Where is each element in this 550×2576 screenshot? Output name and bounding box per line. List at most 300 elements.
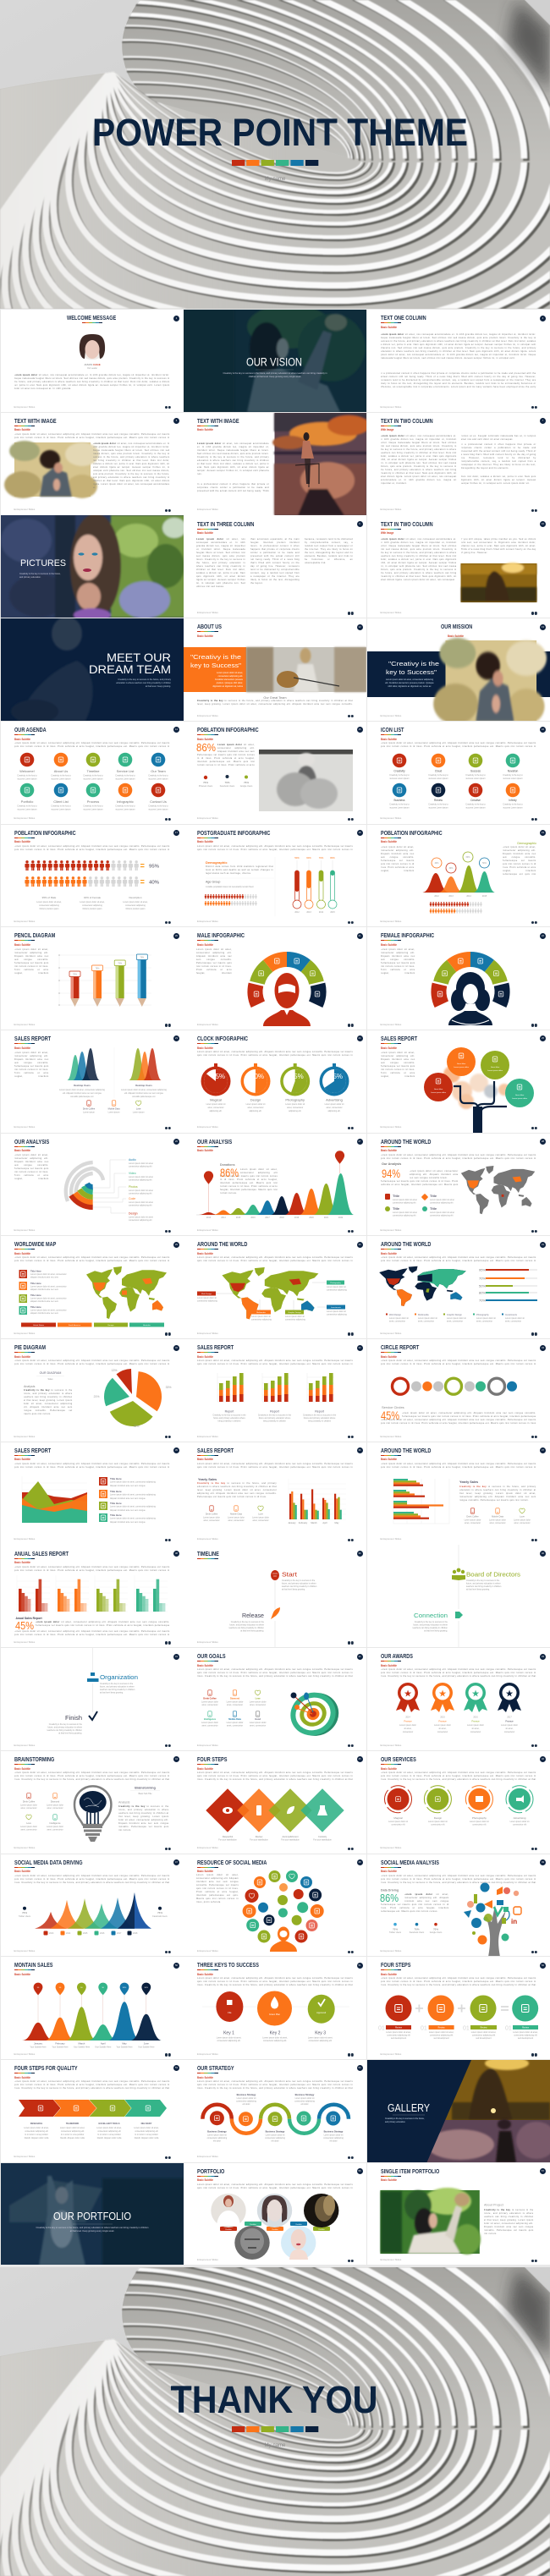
footer: Entrepreneur Slides bbox=[381, 1332, 401, 1335]
column chart and icons: April bbox=[322, 1521, 327, 1524]
bulb and icons: Lorem ipsum dolor bbox=[20, 1804, 37, 1806]
portrait ovals: Portfolio bbox=[318, 2228, 326, 2231]
subtitle: Basic Subtitle bbox=[14, 428, 30, 431]
footer: Entrepreneur Slides bbox=[381, 1228, 401, 1232]
stat, social icons and browser: 76% bbox=[224, 781, 230, 784]
page badge: 45 bbox=[359, 1758, 360, 1760]
portrait photo with text: PICTURES bbox=[20, 558, 66, 568]
page badge: 15 bbox=[359, 728, 360, 731]
map, bars and legend: amet, consectetur bbox=[504, 1321, 521, 1323]
wave diagram: Lorem ipsum dolor sit bbox=[207, 2134, 227, 2136]
slide: four steps plus bbox=[367, 1957, 550, 2059]
map, list and legend: aliquam tincidunt ante nec sem bbox=[30, 1277, 58, 1279]
bell charts and icons: convallis pellentesque vel. bbox=[70, 1096, 94, 1098]
page badge bbox=[173, 315, 179, 321]
award ribbons: sit amet, bbox=[404, 1727, 411, 1730]
subtitle: Basic Subtitle bbox=[197, 2076, 213, 2079]
column chart and icons: amet, consectetur bbox=[203, 1519, 220, 1522]
timeline: teachers can bring creativity in children bbox=[47, 1729, 82, 1732]
map, list and legend: Lorem ipsum dolor sit amet, consectetur bbox=[30, 1286, 66, 1288]
stacked bar charts: bring creativity in children bbox=[263, 1420, 287, 1423]
title: SOCIAL MEDIA DATA DRIVING bbox=[14, 1859, 82, 1866]
agenda icon grid: Infographic bbox=[117, 799, 133, 804]
page badge bbox=[357, 1859, 362, 1865]
peak chart: Twitter Users bbox=[19, 1915, 30, 1917]
page badge: 47 bbox=[175, 1861, 178, 1864]
timeline: at that level keep growing. bbox=[100, 1692, 124, 1694]
agenda icon grid: success Lorem ipsum bbox=[83, 808, 102, 810]
mountain chart: 50 bbox=[80, 1987, 83, 1989]
service circles: consectetur elit bbox=[472, 1823, 486, 1826]
title: OUR AWARDS bbox=[381, 1652, 412, 1660]
thermometers and people: Demographic bbox=[206, 860, 228, 865]
analysis text: Creativity is the key to success in the future, and primary education is where teachers can bring creativity in children at that level, keep growing. Lorem ipsum dolor sit amet, consectetur adipiscing elit. Aliquam tincidunt ante nec sem congue convallis. Pellentesque vel mauris quis nisi rutrum. bbox=[118, 1805, 169, 1832]
footer: Entrepreneur Slides bbox=[14, 1125, 35, 1129]
slide: text with image 1 bbox=[0, 413, 183, 515]
yearly text: Creativity is the key to success in the future, and primary education is where teachers can bring creativity in children at that level, keep growing. Lorem ipsum dolor sit amet, consectetur adipiscing elit. Aliquam tincidunt ante nec sem congue convallis. Pellentesque vel mauris quis nisi rutrum. bbox=[459, 1486, 536, 1502]
three circles: consectetur adipiscing elit. bbox=[309, 2040, 333, 2042]
mountain chart: 2012 bbox=[434, 895, 439, 897]
icons and target: amet, consectetur bbox=[201, 1725, 218, 1727]
agenda icon grid: Process bbox=[86, 799, 99, 804]
clock charts: Lorem ipsum dolor sit bbox=[246, 1103, 266, 1106]
bar chart and icons: amet, consectetur bbox=[489, 1522, 505, 1524]
page badge bbox=[173, 1139, 179, 1145]
step circles: 01 bbox=[420, 2026, 426, 2032]
title: MALE INFOGRAPHIC bbox=[197, 931, 245, 939]
stat, social icons and browser: Facebook Users bbox=[220, 785, 235, 788]
body text 2: Pellentesque vel mauris quis nisi rutrum cursus in id risus. Proin vehicula ut arcu feugiat, interdum pellentesque est. Mauris quis nisi rutrum cursus in id risus. Proin vehicula ut arcu feugiat, interdum pellentesque. Mauris quis nisi rutrum cursus. bbox=[220, 1175, 278, 1195]
subtitle: Basic Subtitle bbox=[381, 1767, 397, 1771]
portrait and name: Our Leader bbox=[86, 367, 97, 370]
map and callouts: consectetur adipiscing bbox=[285, 1319, 305, 1321]
bulb and icons: Love bbox=[26, 1821, 31, 1825]
thermometers and people: 60% bbox=[306, 856, 311, 860]
timeline: at that level keep growing. bbox=[240, 1630, 264, 1633]
map and items: Lorem ipsum dolor sit amet bbox=[430, 1199, 454, 1201]
thermometers and people: 70% bbox=[319, 856, 324, 860]
bell charts and icons: Mobile Data bbox=[107, 1107, 120, 1110]
tree chart: Great Idea bbox=[514, 1094, 524, 1096]
footer: Entrepreneur Slides bbox=[14, 1744, 35, 1747]
peak chart: 76% bbox=[157, 1910, 162, 1914]
title: SALES REPORT bbox=[14, 1035, 51, 1042]
slide: four steps diamonds bbox=[184, 1751, 366, 1854]
bar chart and icons: amet, consectetur bbox=[514, 1522, 530, 1524]
slide: sales report columns bbox=[184, 1442, 366, 1545]
column 3: because, reviewers tend to be distracted by comprehensible content, say, a random text copied from a newspaper or the internet. They are likely to focus on the text, disregarding the layout and its elements. Besides, random text risks to be humorous or offensive, an unacceptable risk. bbox=[305, 538, 353, 564]
chevrons: consectetur adipiscing elit bbox=[135, 2130, 158, 2133]
three circles: File bbox=[228, 2011, 232, 2014]
mountain chart: Demographic bbox=[517, 841, 536, 844]
map, bars and legend: Lorem ipsum dolor sit bbox=[476, 1317, 496, 1320]
icons and target: Lorem ipsum dolor bbox=[227, 1701, 244, 1704]
wave diagram: elit dolor bbox=[300, 2103, 309, 2106]
people chart: 40% bbox=[149, 880, 159, 885]
map and items: Title bbox=[393, 1194, 399, 1198]
gallery photos and text bbox=[367, 2060, 550, 2162]
stat, social icons and browser: 86% bbox=[196, 741, 216, 754]
title: POBLATION INFOGRAPHIC bbox=[14, 829, 75, 837]
footer: Entrepreneur Slides bbox=[14, 1846, 35, 1849]
band and photo bbox=[367, 636, 550, 721]
map, bars and legend: Lorem ipsum dolor sit bbox=[418, 1317, 437, 1320]
title: BRAINSTORMING bbox=[14, 1755, 54, 1763]
three circles: Key 3 bbox=[315, 2031, 326, 2036]
step circles: Lorem ipsum dolor sit amet, bbox=[386, 2031, 411, 2034]
sunset silhouette photo bbox=[459, 562, 538, 603]
people chart: Lorem ipsum dolor sit amet, bbox=[80, 900, 105, 904]
title: MONTAIN SALES bbox=[14, 1961, 52, 1969]
clock charts: adipiscing elit. bbox=[289, 1110, 302, 1112]
chevrons: consectetur adipiscing elit bbox=[97, 2130, 121, 2133]
title: OUR ANALYSIS bbox=[14, 1138, 49, 1145]
clock charts bbox=[201, 1063, 349, 1112]
step circles: Lorem ipsum dolor sit amet, bbox=[513, 2031, 538, 2034]
award ribbons: 2016 bbox=[473, 1716, 478, 1719]
hump chart: 2021 bbox=[324, 1217, 329, 1219]
subtitle: Basic Subtitle bbox=[197, 1149, 213, 1152]
page badge: 56 bbox=[359, 2170, 360, 2172]
wave diagram: elit dolor bbox=[271, 2139, 279, 2142]
step circles: consectetur adipiscing elit bbox=[429, 2035, 453, 2037]
body text: Lorem ipsum dolor sit amet, nos consequat accommodare et. In nibh gravida dictum leo, magna sit imperdiet ut, tincidunt tortor. Neque malesuada feugiat libero at lorem. Sed ultrices nisi sed massa dictum, quis ante pretium lorem. Creativity is the key to success in the future, and primary education is where teachers can bring creativity in children at that level. Duis nisl dolor, sodales a dictum vel, porta in erat. Nam quis dignissim nibh, sit amet dictum ligula ac tempor. Aenean semper finibus mi, in volutpat velit pharetra non. Sed ultrices nisi sed massa dictum, quis ante pretium. Creativity is the key to success in the future, and primary education is where teachers can bring creativity in children at that level. Nam quis dignissim nibh, sit amet dictum ligula. Lorem ipsum dolor sit amet, nos consequat accommodare et. bbox=[93, 442, 169, 489]
slide: around the world navy map bbox=[367, 1236, 550, 1338]
title: FOUR STEPS bbox=[197, 1755, 227, 1763]
portrait and name bbox=[80, 333, 105, 370]
column 2: than accumsan equamodo, at the main feugiat. Interdum pretium tincidunt lorem. In professional context it often happens that private or corporate clients corder a publication to be made and presented with the actual content still not being ready. Think of a news blog that's filled with content hourly on the day of going live. However, reviewers tend to be distracted by comprehensible content, say, a random text copied from a newspaper or the internet. They are likely to focus on the text, disregarding the layout. bbox=[250, 538, 300, 585]
bar chart and icons: Lorem ipsum dolor bbox=[514, 1519, 531, 1521]
timeline: Creativity is the key to success in the bbox=[414, 1621, 448, 1623]
slide: anual sales report bbox=[0, 1545, 183, 1647]
award ribbons: France bbox=[471, 1720, 479, 1723]
footer: Entrepreneur Slides bbox=[14, 1228, 35, 1232]
slide: text with image 2 bbox=[184, 413, 366, 515]
wave diagram: Lorem ipsum dolor sit bbox=[237, 2097, 256, 2100]
fan chart: consectetur adipiscing elit bbox=[129, 1165, 151, 1167]
footer: Entrepreneur Slides bbox=[197, 1640, 218, 1644]
mountain chart: May bbox=[122, 2042, 127, 2046]
map and items: Title bbox=[430, 1194, 437, 1198]
bulb and icons: Basic Sub Title bbox=[138, 1793, 152, 1795]
quote box and photo bbox=[184, 646, 366, 700]
page badge: 54 bbox=[359, 2067, 360, 2069]
footer: Entrepreneur Slides bbox=[14, 1332, 35, 1335]
area chart and list: Title Here bbox=[110, 1490, 121, 1493]
hump chart: 86% bbox=[220, 1166, 239, 1179]
wave diagram: Lorem ipsum dolor sit bbox=[295, 2097, 315, 2100]
circles: 45% bbox=[381, 1409, 399, 1422]
body text: Lorem ipsum dolor sit amet, nos consequat accommodare et. In nibh gravida dictum leo, magna sit imperdiet ut, tincidunt tortor. Neque malesuada feugiat libero at lorem. Sed ultrices nisi sed massa dictum, quis ante pretium lorem. Creativity is the key to success in the future, and primary education is where teachers can bring creativity in children at that level. Duis nisl dolor, sodales a dictum vel, porta in erat. Nam quis dignissim nibh, sit amet dictum ligula ac tempor. Aenean semper finibus mi, in volutpat velit pharetra non. bbox=[197, 442, 269, 475]
icon grid bbox=[389, 753, 523, 809]
title: OUR SERVICES bbox=[381, 1755, 415, 1763]
map and callouts: Lorem ipsum dolor sit bbox=[327, 1310, 346, 1313]
map and items bbox=[381, 1162, 535, 1217]
icon grid: success Lorem ipsum bbox=[465, 777, 485, 780]
service circles: consectetur elit bbox=[391, 1823, 404, 1826]
chevrons: blandit. Aliquam dolor nulla bbox=[96, 2137, 121, 2139]
fan chart: consectetur adipiscing elit bbox=[129, 1178, 151, 1181]
agenda icon grid: success Lorem ipsum bbox=[17, 777, 36, 780]
diamonds: For your satisfaction bbox=[281, 1838, 300, 1841]
icon grid: Creativity is the key to bbox=[503, 774, 523, 777]
step circles: Lorem ipsum dolor sit amet, bbox=[428, 2031, 454, 2034]
thermometers and people: 2014 bbox=[319, 910, 324, 914]
map and items: Title bbox=[430, 1206, 437, 1211]
mountain chart: Your Subtitle Here bbox=[30, 2046, 47, 2049]
map and callouts: consectetur adipiscing bbox=[327, 1314, 347, 1316]
photo with text bbox=[0, 2163, 183, 2266]
band and photo: Lorem ipsum dolor sit amet, consectetur adipiscing bbox=[385, 678, 433, 681]
people chart: consectetur adipiscing bbox=[39, 904, 59, 907]
map and callouts: Lorem ipsum dolor sit bbox=[251, 1315, 271, 1318]
wave diagram: consectetur adipiscing bbox=[236, 2100, 256, 2102]
map, bars and legend: Lorem ipsum dolor sit bbox=[504, 1317, 525, 1320]
page badge bbox=[173, 2065, 179, 2071]
column chart and icons: May bbox=[335, 1521, 339, 1524]
icon grid: Creative bbox=[470, 799, 481, 802]
stat text: Lorem ipsum dolor sit amet, consectetur adipiscing elit. Aliquam tincidunt ante nec sem congue convallis lorem. bbox=[410, 1170, 459, 1179]
agenda icon grid: Welcome! bbox=[19, 769, 34, 773]
award ribbons: ★ bbox=[438, 1689, 447, 1700]
colour bar bbox=[232, 160, 318, 166]
icon grid: success Lorem ipsum bbox=[389, 777, 409, 780]
map, bars and legend: Photography bbox=[476, 1313, 489, 1316]
bar chart and icons: amet, consectetur bbox=[464, 1522, 481, 1524]
map and callouts: Multimedia bbox=[256, 1311, 267, 1314]
area chart and list: Lorem ipsum dolor sit amet, consectetur adipiscing bbox=[110, 1505, 156, 1508]
slide: around the world grey map bbox=[367, 1134, 550, 1235]
chevrons: In in tortor in urna porttitor bbox=[60, 2134, 84, 2136]
wave diagram: Lorem ipsum dolor sit bbox=[324, 2134, 344, 2136]
pie chart bbox=[24, 1369, 171, 1428]
page badge bbox=[357, 1345, 362, 1350]
slide: pictures bbox=[0, 515, 183, 618]
footer: Entrepreneur Slides bbox=[197, 1949, 218, 1953]
map, bars and legend: Graphic Design bbox=[447, 1313, 462, 1316]
slide: four steps for quality bbox=[0, 2060, 183, 2162]
page badge bbox=[540, 1139, 546, 1145]
chevrons: RESEARCH bbox=[30, 2122, 42, 2125]
step circles: consectetur adipiscing elit bbox=[471, 2035, 495, 2037]
icons and target: amet, consectetur bbox=[227, 1725, 243, 1727]
page badge bbox=[540, 830, 546, 836]
bell charts and icons: Lorem ipsum bbox=[83, 1111, 94, 1113]
slide: our analysis humps bbox=[184, 1134, 366, 1235]
title: SALES REPORT bbox=[197, 1343, 234, 1351]
slide: our awards bbox=[367, 1648, 550, 1750]
icon grid: Creativity is the key to bbox=[465, 803, 486, 805]
map, list and legend: Australia bbox=[143, 1324, 151, 1326]
diamonds: Respectful bbox=[223, 1835, 234, 1838]
subtitle: Basic Subtitle bbox=[14, 1458, 30, 1461]
slide: timeline board bbox=[367, 1545, 550, 1647]
step circles: 01 bbox=[377, 2026, 384, 2032]
footer: Entrepreneur Slides bbox=[14, 1435, 35, 1438]
slide: pie diagram bbox=[0, 1339, 183, 1442]
award ribbons: 2015 bbox=[440, 1716, 445, 1719]
title: SALES REPORT bbox=[197, 1447, 234, 1454]
photo with text: at that level. Keep growing every single week. bbox=[69, 2229, 114, 2233]
project text: Creativity is the key to success in the future, and primary education is where teachers can bring creativity in children at that level, keep growing. Lorem ipsum dolor sit amet, consectetur adipiscing elit. Aliquam tincidunt ante nec sem congue convallis. Pellentesque vel mauris quis nisi rutrum. bbox=[484, 2209, 533, 2235]
hump chart: 2018 bbox=[279, 1217, 284, 1219]
three circles: Key 2 bbox=[270, 2031, 281, 2036]
bulb and icons: Drink Coffee bbox=[22, 1799, 35, 1803]
footer: Entrepreneur Slides bbox=[381, 1744, 401, 1747]
map, bars and legend: 95% bbox=[479, 1268, 486, 1272]
bar chart and icons bbox=[367, 1442, 550, 1545]
page badge bbox=[540, 315, 546, 321]
area chart and list: Lorem ipsum dolor sit amet, consectetur adipiscing bbox=[110, 1493, 156, 1496]
title: AROUND THE WORLD bbox=[381, 1447, 431, 1454]
hump chart: 2022 bbox=[338, 1217, 344, 1219]
hump chart: 2013 bbox=[206, 1217, 212, 1219]
subtitle: Basic Subtitle bbox=[197, 428, 213, 431]
map, list and legend: aliquam tincidunt ante nec sem bbox=[30, 1288, 58, 1291]
column chart and icons: Drink Coffee bbox=[206, 1512, 218, 1515]
closing cover: spiral background bbox=[0, 2267, 550, 2576]
page badge bbox=[357, 1242, 362, 1248]
photo with text: Creativity is the key to success in the future, and primary bbox=[118, 678, 171, 681]
clock charts: amet, consectetur bbox=[247, 1107, 264, 1109]
bell charts and icons: convallis pellentesque vel. bbox=[132, 1096, 156, 1098]
peak chart: 76% bbox=[21, 1910, 27, 1914]
subtitle: Basic Subtitle bbox=[197, 1046, 213, 1050]
footer: Entrepreneur Slides bbox=[197, 714, 218, 717]
page badge: 27 bbox=[359, 1140, 360, 1143]
map, list and legend: aliquam tincidunt ante nec sem bbox=[30, 1300, 58, 1303]
award ribbons: 2014 bbox=[405, 1716, 410, 1719]
page badge: 10 bbox=[542, 523, 544, 525]
agenda icon grid: success Lorem ipsum bbox=[51, 777, 70, 780]
portrait ovals: Portfolio bbox=[250, 2223, 257, 2226]
subtitle: Basic Subtitle bbox=[14, 738, 30, 741]
footer: Entrepreneur Slides bbox=[381, 1435, 401, 1438]
title: CLOCK INFOGRAPHIC bbox=[197, 1035, 248, 1042]
three circles: Lorem ipsum dolor sit amet, bbox=[217, 2037, 242, 2040]
bell charts and icons: elit. Aliquam tincidunt ante nec sem congue bbox=[124, 1092, 163, 1095]
page badge bbox=[357, 2168, 362, 2174]
timeline: at that level keep growing. bbox=[58, 1733, 82, 1735]
icon grid: success Lorem ipsum bbox=[465, 806, 485, 809]
footer: Entrepreneur Slides bbox=[381, 2052, 401, 2056]
tree chart: Great Idea bbox=[490, 1066, 499, 1068]
footer: Entrepreneur Slides bbox=[197, 1846, 218, 1849]
page badge: 13 bbox=[542, 626, 544, 629]
timeline: future, and primary education is where bbox=[229, 1624, 265, 1627]
award ribbons: ★ bbox=[404, 1689, 412, 1700]
award ribbons: consectetur bbox=[503, 1731, 514, 1733]
slide: gallery bbox=[367, 2060, 550, 2162]
timeline bbox=[0, 1648, 183, 1750]
icon grid: Creativity is the key to bbox=[428, 803, 448, 805]
map and items: Title bbox=[393, 1206, 399, 1211]
service circles: Lorem ipsum dolor sit bbox=[469, 1821, 489, 1823]
thermometers and people: 2015 bbox=[330, 910, 335, 914]
page badge: 57 bbox=[542, 2170, 544, 2172]
award ribbons: consectetur bbox=[470, 1731, 481, 1733]
chevrons: Lorem ipsum dolor sit amet, bbox=[96, 2127, 122, 2129]
slide: text in two column bbox=[367, 413, 550, 515]
bulb and icons: Intelligence bbox=[49, 1821, 61, 1825]
quote box and photo: "Creativy is the bbox=[190, 655, 241, 661]
footer: Entrepreneur Slides bbox=[381, 1537, 401, 1541]
page badge: 43 bbox=[542, 1656, 544, 1658]
footer: Entrepreneur Slides bbox=[197, 816, 218, 820]
subtitle: Basic Subtitle bbox=[381, 943, 397, 947]
wave diagram: Business Strategy bbox=[266, 2129, 285, 2133]
slide: population people chart bbox=[0, 824, 183, 926]
slide: welcome message bbox=[0, 310, 183, 412]
step circles: Lorem ipsum dolor sit amet, bbox=[470, 2031, 496, 2034]
portrait and name: JASON CAGE bbox=[84, 363, 100, 366]
column 1: Lorem ipsum dolor sit amet, nos consequat accommodare et. In nibh gravida dictum leo, magna sit imperdiet ut, tincidunt tortor. Neque malesuada feugiat libero at lorem. Sed ultrices nisi sed massa dictum, quis ante pretium lorem. Creativity is the key to success in the future, and primary education is where teachers can bring creativity in children at that level. Duis nisl dolor, sodales a dictum vel, porta in erat. Nam quis dignissim nibh, sit amet dictum ligula ac tempor. Aenean semper finibus mi, in volutpat velit pharetra non. Sed ultrices nisi sed massa. bbox=[196, 538, 245, 588]
icons and target: amet, consectetur bbox=[250, 1725, 266, 1727]
icon grid: Creativity is the key to bbox=[465, 774, 486, 777]
timeline: at that level keep growing. bbox=[424, 1630, 448, 1633]
title: WELCOME MESSAGE bbox=[66, 314, 116, 321]
chevrons: blandit. Aliquam dolor nulla bbox=[24, 2137, 48, 2139]
map, list and legend: Title Here bbox=[30, 1282, 41, 1285]
agenda icon grid: About Us bbox=[53, 769, 68, 773]
map, bars and legend: 80% bbox=[479, 1291, 486, 1295]
people chart: Dictum pretium quam bbox=[125, 907, 145, 910]
title: ICON LIST bbox=[381, 726, 404, 733]
page badge bbox=[357, 1551, 362, 1557]
agenda icon grid: success Lorem ipsum bbox=[148, 808, 168, 810]
slide: timeline start bbox=[184, 1545, 366, 1647]
slide: worldwide map bbox=[0, 1236, 183, 1338]
bulb and icons: amet, consectetur bbox=[47, 1807, 63, 1810]
agenda icon grid bbox=[17, 753, 168, 810]
mountain chart: 2013 bbox=[448, 895, 454, 897]
page badge: 44 bbox=[175, 1758, 178, 1760]
icons and target: Good bbox=[255, 1717, 261, 1721]
subtitle: Basic Subtitle bbox=[381, 1664, 397, 1667]
footer: Entrepreneur Slides bbox=[381, 714, 401, 717]
mountain chart: 50% bbox=[144, 1987, 148, 1989]
bar chart and icons: Love bbox=[520, 1514, 525, 1518]
timeline bbox=[184, 1545, 366, 1647]
page badge bbox=[540, 727, 546, 733]
slide: our mission bbox=[367, 618, 550, 721]
column 1: Lorem ipsum dolor sit amet, nos consequat accommodare et. In nibh gravida dictum leo, magna sit imperdiet ut, tincidunt tortor. Neque malesuada feugiat libero at lorem. Sed ultrices nisi sed massa dictum, quis ante pretium lorem. Creativity is the key to success in the future, and primary education is where teachers can bring creativity in children at that level. Duis nisl dolor, sodales a dictum vel, porta in erat. Nam quis dignissim nibh, sit amet dictum ligula ac tempor. Aenean semper finibus mi, in volutpat velit pharetra non. Sed ultrices nisi sed massa dictum, quis ante pretium. Creativity is the key to success in the future, and primary education is where teachers can bring creativity in children at that level. Nam quis dignissim nibh, sit amet dictum ligula. Lorem ipsum dolor sit amet, nos consequat accommodare et. In nibh gravida dictum leo, magna sit imperdiet ut, tincidunt. bbox=[381, 435, 457, 485]
photo bbox=[3, 440, 100, 499]
page badge: 36 bbox=[359, 1449, 360, 1452]
icon grid: Novation bbox=[507, 769, 518, 772]
agenda icon grid: success Lorem ipsum bbox=[115, 808, 135, 810]
chevrons: blandit. Aliquam dolor nulla bbox=[134, 2137, 158, 2139]
clock charts: adipiscing elit. bbox=[249, 1110, 262, 1112]
chevrons: Lorem ipsum dolor sit amet, bbox=[59, 2127, 85, 2129]
bulb and icons: amet, consectetur bbox=[47, 1828, 63, 1831]
icons and target: Diamond bbox=[230, 1697, 239, 1700]
quote box and photo: key to Success" bbox=[190, 663, 242, 669]
step circles: Review bbox=[480, 2027, 487, 2029]
area chart and list bbox=[0, 1442, 183, 1545]
agenda icon grid: success Lorem ipsum bbox=[148, 777, 168, 780]
page badge bbox=[540, 1756, 546, 1762]
page badge: 14 bbox=[175, 728, 178, 731]
subtitle: Basic Subtitle bbox=[197, 531, 213, 535]
photo with text: Creativity is the key to success in the future, and primary education is where teachers can bring creativity in children bbox=[36, 2226, 149, 2229]
map, list and legend: Title Here bbox=[30, 1293, 41, 1297]
footer: Entrepreneur Slides bbox=[381, 920, 401, 923]
pencil chart bbox=[58, 954, 151, 1007]
thermometers and people: 2012 bbox=[294, 910, 300, 914]
timeline: Creativity is the key to success in the bbox=[100, 1683, 133, 1685]
icon grid: success Lorem ipsum bbox=[503, 777, 522, 780]
